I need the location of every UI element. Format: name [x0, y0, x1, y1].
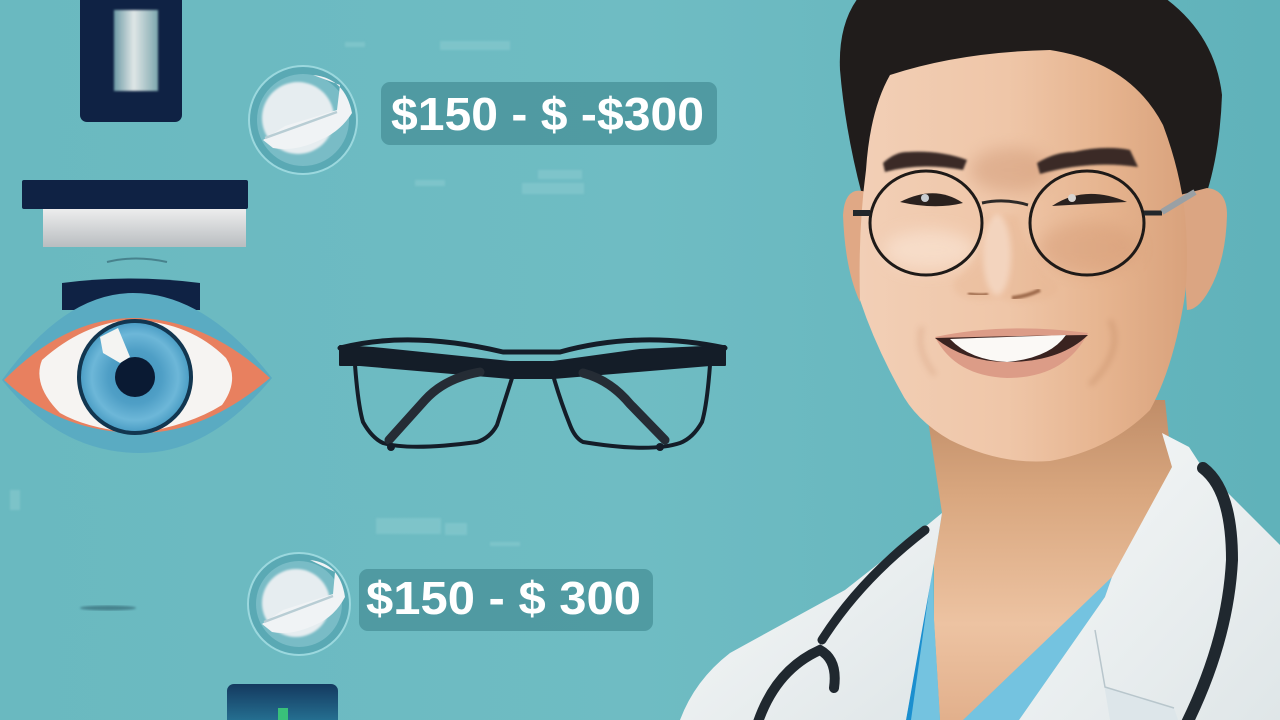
round glasses	[853, 171, 1195, 275]
icon: white shelf with dark bar	[22, 180, 248, 247]
white coat	[680, 433, 1280, 720]
faded background marks	[10, 41, 584, 546]
icon: bottom device	[227, 684, 338, 720]
icon: top lens case 1	[249, 66, 357, 174]
small dash mark	[80, 606, 136, 610]
blue scrubs	[906, 567, 1112, 720]
icon: large eye	[2, 258, 272, 453]
doctor portrait	[680, 0, 1280, 720]
smile	[935, 328, 1088, 378]
hair	[840, 0, 1222, 195]
face	[860, 50, 1187, 462]
icon: top dark device	[80, 0, 182, 122]
face shading	[884, 148, 1138, 385]
price tag: bottom: $150 - $ 300	[366, 572, 641, 624]
neck	[925, 400, 1172, 720]
eyebrows	[883, 148, 1138, 174]
ear left	[843, 191, 866, 302]
ear right	[1180, 188, 1227, 310]
stethoscope	[757, 468, 1232, 720]
icon: black eyeglasses	[340, 340, 725, 451]
price tag: top: $150 - $ -$300	[391, 88, 704, 140]
eyes	[900, 193, 1127, 206]
nose	[954, 215, 1058, 302]
icon: bottom lens case 2	[248, 553, 350, 655]
